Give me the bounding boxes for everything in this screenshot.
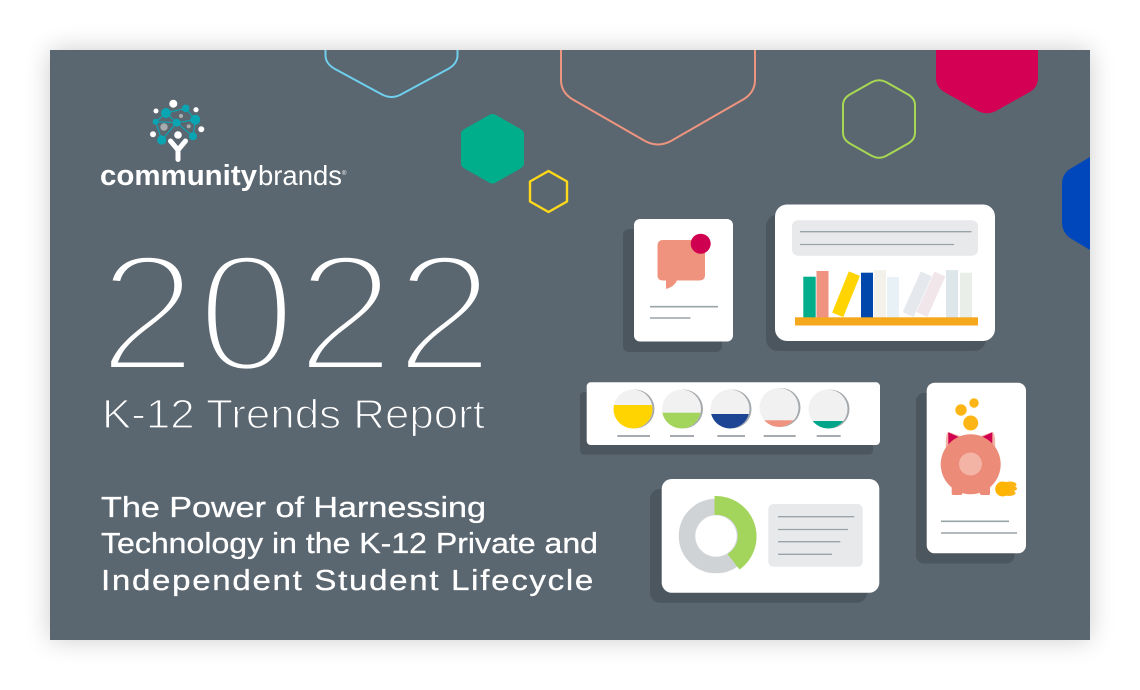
hexagon: crimson filled <box>936 50 1038 113</box>
circle: blue <box>710 390 752 428</box>
logo icon: tree <box>150 100 204 160</box>
logo: Community Brands <box>100 100 347 192</box>
tagline text block: Independent Student Lifecycle <box>101 565 595 597</box>
hexagon: blue filled <box>1062 157 1090 250</box>
tagline text block <box>101 492 598 597</box>
shelf <box>795 317 978 326</box>
hexagon: lime outline <box>843 80 915 158</box>
card: notification <box>623 219 733 352</box>
tagline text block: The Power of Harnessing <box>101 492 486 524</box>
icon: speech bubble <box>658 234 711 289</box>
text placeholder <box>768 504 863 567</box>
circle: salmon <box>760 388 800 427</box>
card: progress circles <box>580 382 880 454</box>
circle: yellow <box>614 390 654 428</box>
icon: falling coins <box>955 398 979 430</box>
donut chart <box>687 496 757 570</box>
text placeholder <box>792 220 978 256</box>
tagline text block: Technology in the K-12 Private and <box>101 528 598 560</box>
registered mark: ® <box>342 170 347 177</box>
hexagon: salmon outline <box>561 50 755 144</box>
hexagon: green filled <box>467 120 518 178</box>
circle: green <box>662 390 703 428</box>
logo wordmark: community: community <box>100 160 257 192</box>
subtitle: K-12 Trends Report: K-12 Trends Report <box>102 391 486 437</box>
title: 2022: 2022 <box>98 219 494 407</box>
card: bookshelf <box>766 204 995 351</box>
books on shelf <box>803 270 972 318</box>
background panel <box>50 50 1090 640</box>
logo wordmark: brands: brands <box>258 160 342 191</box>
card: piggy bank <box>916 383 1026 564</box>
icon: piggy bank <box>941 432 1001 495</box>
cover artwork <box>101 50 1090 603</box>
icon: coin stack <box>995 482 1017 496</box>
card: donut chart <box>650 479 879 603</box>
hexagon: cyan outline <box>326 50 458 97</box>
circle: teal <box>808 390 850 428</box>
hexagon: yellow outline <box>530 171 567 212</box>
